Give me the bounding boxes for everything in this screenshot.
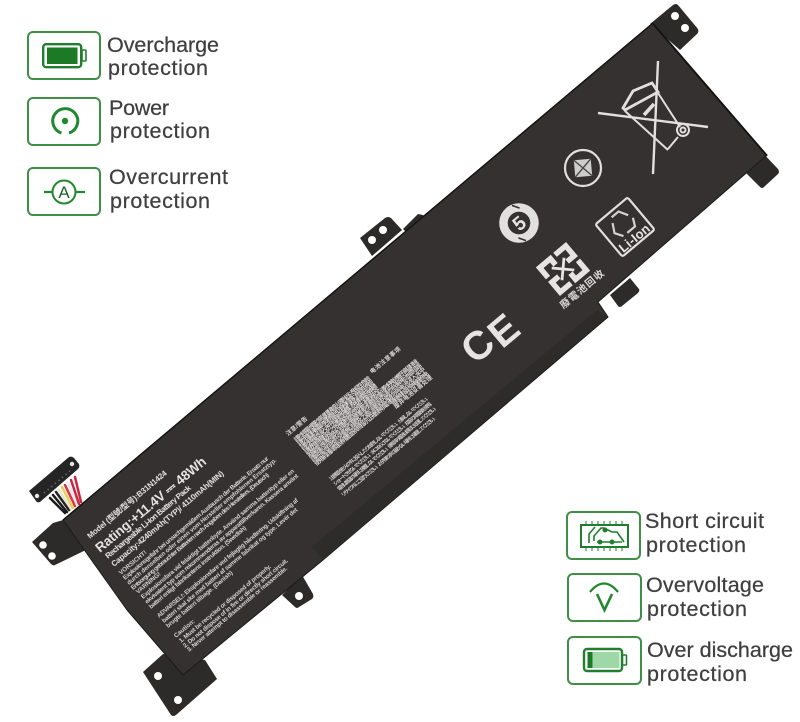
mounting holes	[39, 12, 689, 704]
icon: packaging circle mark	[565, 150, 601, 186]
icon: recycling fund mark	[533, 238, 607, 311]
label: Chinese safety notes: 电池注意事项	[368, 345, 402, 376]
label: Chinese safety notes: 请勿将电池浸入水中	[385, 366, 427, 403]
label: German warning: Entsorgung gebrauchter Batterien nach Angaben des Herstellers. (Deutsch)	[130, 472, 271, 592]
text: short circuit protection: Short circuit	[645, 509, 764, 533]
text: over discharge protection	[647, 638, 793, 686]
panel: power protection	[28, 96, 210, 145]
icon: 5 recycling ring: 5	[508, 212, 531, 236]
label: caution: 3. Never attempt to disassemble or reassemble.	[186, 565, 289, 654]
text: power protection: protection	[110, 119, 210, 143]
panel: overcurrent protection	[28, 165, 228, 215]
text: overcharge protection	[107, 33, 219, 80]
label: Chinese safety notes: 請勿將電池置於高溫環境或火源附近以免發生危險	[292, 374, 372, 444]
label: Chinese safety notes: 请勿将电池置于高温环境	[378, 358, 420, 395]
text: over discharge protection: protection	[647, 662, 747, 686]
label: Chinese safety notes: 請勿將電池浸入水中或其他液體以免損壞電池本體	[299, 382, 379, 452]
label: rating text: Model (型號/型号):B31N1424	[85, 468, 169, 541]
label: Chinese safety notes: 请使用指定充电器充电	[389, 370, 431, 407]
icon: low battery	[584, 649, 626, 671]
panel: overcharge protection	[28, 32, 219, 80]
label: Chinese safety notes: 廢棄電池請依當地法規妥善處理請勿隨意丟棄	[306, 390, 386, 460]
label: Chinese safety notes: 请勿拆解电池或短路	[382, 362, 424, 399]
label: Chinese safety notes	[284, 345, 434, 468]
icon: voltmeter arc	[590, 584, 618, 610]
icon: crossed-out wheelie bin	[598, 61, 708, 174]
panel: short circuit protection	[567, 509, 764, 559]
text: overvoltage protection: Overvoltage	[646, 573, 764, 597]
CE mark: E	[480, 306, 528, 357]
icon: full battery	[43, 44, 86, 67]
connector plug	[29, 457, 79, 502]
label: Danish warning: brugte batteri tilbage. (Danish)	[165, 570, 234, 630]
label: Chinese safety notes: 注意/警告	[284, 415, 309, 438]
label: German warning: VORSICHT!	[118, 549, 148, 577]
text: power protection	[109, 96, 210, 143]
label: German warning: durch denselben oder einen vom Hersteller empfohlenen Ersatztyp.	[126, 457, 278, 587]
label: caution: 1. Must be recycled or disposed of properly.	[178, 563, 273, 645]
label: Danish warning: batteri skal ske med batteri af samme fabrikat og type. Levér det	[161, 507, 299, 625]
label: Japanese and Korean notes: 電池は高温の場所に放置しないでください。使用済み電池は適切に処理してください。	[335, 403, 440, 493]
text: short circuit protection: protection	[646, 533, 746, 557]
label: Japanese and Korean notes: 注意: 電池を火の中に投入したり 加熱しないでください。分解しないでください。	[327, 393, 432, 483]
CE mark	[453, 306, 528, 372]
text: over discharge protection: Over discharge	[647, 638, 793, 662]
connector wires	[50, 477, 81, 513]
label: caution: Caution:	[173, 618, 197, 640]
label: rating text: Capacity:4240mAh(TYP)/ 4110mAh(MIN)	[110, 469, 226, 569]
label: Chinese safety notes: 請勿擅自拆解電池或使電池正負極短路以免發生危險	[296, 378, 376, 448]
icon: recycling fund mark: 廢電池回收	[557, 267, 607, 311]
text: overcharge protection: Overcharge	[107, 33, 219, 57]
icon: ammeter: A	[58, 183, 70, 202]
label: rating text: Rating:+11.4V ⎓ 48Wh	[92, 454, 209, 555]
icon: Li-Ion recycling mark	[595, 197, 655, 257]
text: overcurrent protection: protection	[110, 189, 210, 213]
icon: circuit chip	[581, 521, 628, 551]
label: Swedish warning: VARNING!	[135, 571, 162, 596]
label: Japanese and Korean notes: リサイクルにご協力ください。お子様の手の届かない場所に保管してください。	[339, 413, 439, 499]
text: overcurrent protection: Overcurrent	[109, 165, 228, 189]
label: Japanese and Korean notes: ショートさせないでください。水にぬらさないでください。指定の充電器を使用。	[331, 398, 436, 488]
text: short circuit protection	[645, 509, 764, 557]
icon: Li-Ion recycling mark: Li-Ion	[616, 221, 653, 255]
label: rating text: Rechargeable Li-Ion Battery Pack	[104, 483, 193, 561]
text: overcurrent protection	[109, 165, 228, 213]
label: Chinese safety notes: 請將電池存放於兒童無法觸及之處以確保安全	[309, 393, 391, 464]
label: caution: 2. Do not dispose of in fire or directly short circuit.	[182, 557, 290, 650]
CE mark: C	[453, 320, 503, 372]
panel: over discharge protection	[568, 637, 793, 686]
label: Chinese safety notes: 废弃电池妥善处理	[392, 374, 434, 411]
icon: power ring	[53, 109, 78, 133]
icon: ammeter	[44, 180, 85, 204]
label: Swedish warning: ekvivalent typ som rekommenderas av apparattillverkaren. Kassera använt	[144, 473, 300, 606]
label: Chinese safety notes: 使用前請詳閱說明書並依照指示正確使用電池	[313, 397, 394, 468]
label: Swedish warning: batteri enligt fabrikantens instruktion. (Swedish)	[148, 525, 248, 611]
label: Danish warning: ADVARSEL!: Eksplosionsfare ved fejlagtig håndtering. Udskiftning af	[156, 497, 300, 620]
panel: overvoltage protection	[568, 573, 764, 621]
icon: 5 recycling ring	[496, 199, 542, 247]
text: overvoltage protection	[646, 573, 764, 621]
text: power protection: Power	[109, 96, 169, 120]
text: overcharge protection: protection	[108, 56, 208, 80]
label: German warning: Explosionsgefahr bei unsachgemäßem Austausch der Batterie. Ersatz nur	[122, 455, 271, 582]
label: Swedish warning: Explosionsfara vid felaktigt batteribyte. Använd samma batterityp eller en	[140, 468, 296, 601]
main battery body	[63, 23, 767, 675]
text: overvoltage protection: protection	[647, 597, 747, 621]
label: Chinese safety notes: 請使用原廠指定之充電器為電池充電以確保安全	[302, 386, 383, 456]
